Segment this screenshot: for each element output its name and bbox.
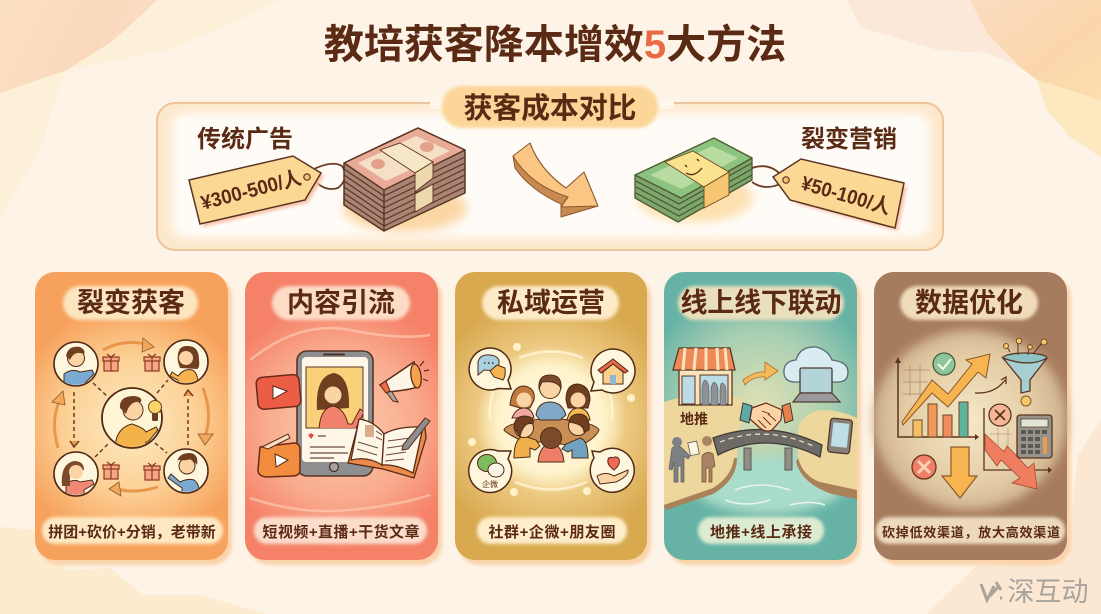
card shadow	[878, 277, 1071, 565]
card shadow	[668, 277, 861, 565]
card heading: 私域运营	[497, 288, 605, 318]
icon: orange play button	[258, 434, 300, 477]
caption pill: 拼团+砍价+分销，老带新	[48, 523, 216, 541]
decorative swooshes	[250, 328, 430, 511]
glowing community rings	[468, 343, 635, 496]
caption pill: 社群+企微+朋友圈	[488, 523, 616, 541]
icon: megaphone	[380, 361, 429, 402]
title: 教培获客降本增效5大方法	[324, 23, 786, 67]
icon: small green banknotes	[635, 138, 753, 222]
caption pill: 短视频+直播+干货文章	[262, 523, 420, 541]
icon: phone	[827, 418, 853, 454]
arrow: cost going down	[513, 143, 598, 217]
icon: x mark	[989, 404, 1011, 426]
icon: open book and pen	[348, 418, 430, 478]
panel: 裂变获客	[35, 272, 232, 565]
person: center with idea	[102, 388, 162, 450]
icon: red cross	[912, 455, 936, 479]
panel: 线上线下联动	[664, 272, 861, 565]
panel: 私域运营	[455, 272, 651, 565]
caption pill	[477, 517, 627, 544]
label: 地推: 地推	[680, 411, 708, 427]
card heading: 数据优化	[915, 288, 1023, 318]
person: top left	[54, 342, 98, 390]
icon: storefront with crowd	[673, 348, 735, 405]
dashed connection lines	[70, 380, 193, 457]
person: top right	[164, 340, 208, 385]
card background	[455, 272, 647, 560]
bubble: 企微	[469, 450, 512, 493]
watermark: 深互动: 深互动	[1008, 577, 1088, 607]
card heading	[482, 286, 619, 320]
bubble: chat	[469, 348, 511, 390]
icon: cloud with laptop	[784, 347, 848, 402]
arrow: chart to funnel	[975, 377, 1006, 393]
card shadow	[39, 277, 232, 565]
card shadow	[249, 277, 442, 565]
person: bottom left	[54, 452, 98, 500]
icons: street promoters	[669, 436, 715, 482]
card background	[245, 272, 438, 560]
chart: falling trend	[984, 408, 1052, 489]
analysis glow	[873, 330, 1067, 510]
caption pill	[876, 517, 1065, 544]
card shadow	[459, 277, 651, 565]
card background	[664, 272, 857, 560]
chart: rising bars and arrow	[895, 354, 990, 440]
comparison panel frame	[157, 103, 943, 250]
caption pill	[698, 517, 824, 544]
label: 传统广告: 传统广告	[197, 126, 293, 153]
landscape: banks and river	[664, 395, 857, 513]
price tag: 裂变营销	[752, 159, 907, 231]
card background	[35, 272, 228, 560]
icon: red play button	[256, 374, 301, 410]
heading pill: 获客成本对比: 获客成本对比	[464, 92, 636, 125]
panel: 内容引流	[245, 272, 442, 565]
icon: handshake	[740, 403, 793, 431]
card heading	[272, 286, 410, 320]
bubble: house	[591, 349, 635, 393]
circular referral arrows	[52, 338, 213, 496]
icon: stack of red banknotes	[343, 128, 467, 232]
icon: check mark	[933, 353, 955, 375]
card heading	[900, 286, 1038, 320]
arrow: cut low efficiency down	[942, 447, 977, 498]
panel inner white wash	[172, 113, 930, 238]
bubble: 企微: 企微	[482, 479, 498, 489]
card heading: 裂变获客	[77, 288, 185, 318]
card background	[874, 272, 1067, 560]
icon: calculator	[1017, 415, 1052, 458]
icon: bridge	[713, 429, 822, 470]
heading pill: 获客成本对比	[430, 86, 674, 128]
label: 裂变营销: 裂变营销	[801, 125, 897, 153]
panel: 获客成本对比	[157, 86, 943, 250]
caption pill	[254, 517, 427, 544]
panel: 数据优化	[873, 272, 1071, 565]
bubble: heart in hand	[590, 448, 634, 492]
arrow: store to cloud	[743, 362, 778, 385]
price tag: 传统广告: ¥300-500/人	[199, 167, 304, 215]
caption pill	[42, 517, 223, 544]
caption pill: 地推+线上承接	[710, 523, 812, 541]
caption pill: 砍掉低效渠道，放大高效渠道	[882, 525, 1060, 540]
price tag: 传统广告	[189, 156, 345, 227]
person: bottom right	[164, 449, 208, 496]
card heading: 内容引流	[287, 288, 395, 318]
card heading: 线上线下联动	[680, 288, 842, 318]
icon: funnel	[1003, 338, 1047, 406]
icon: gifts	[103, 354, 160, 480]
icon: smartphone with video	[297, 351, 373, 476]
price tag: 裂变营销: ¥50-100/人	[798, 173, 893, 219]
people around table	[504, 375, 599, 462]
